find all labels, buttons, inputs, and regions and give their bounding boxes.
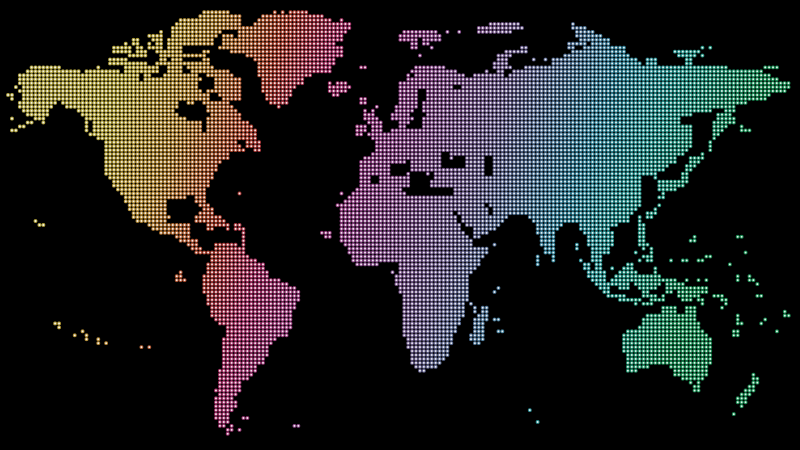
islands: Indonesia and Southeast Asia xyxy=(585,256,726,308)
island: Madagascar and Indian Ocean islands xyxy=(471,245,538,422)
continent: Africa xyxy=(338,186,487,371)
islands: New Zealand xyxy=(734,375,757,414)
continent: North and Central America xyxy=(8,12,259,253)
continent: Australia xyxy=(624,308,710,390)
continent: South America xyxy=(204,256,298,434)
continent: Greenland xyxy=(255,12,349,107)
continent: Europe and Asia xyxy=(357,24,789,264)
islands: Atlantic and Pacific xyxy=(36,83,789,430)
